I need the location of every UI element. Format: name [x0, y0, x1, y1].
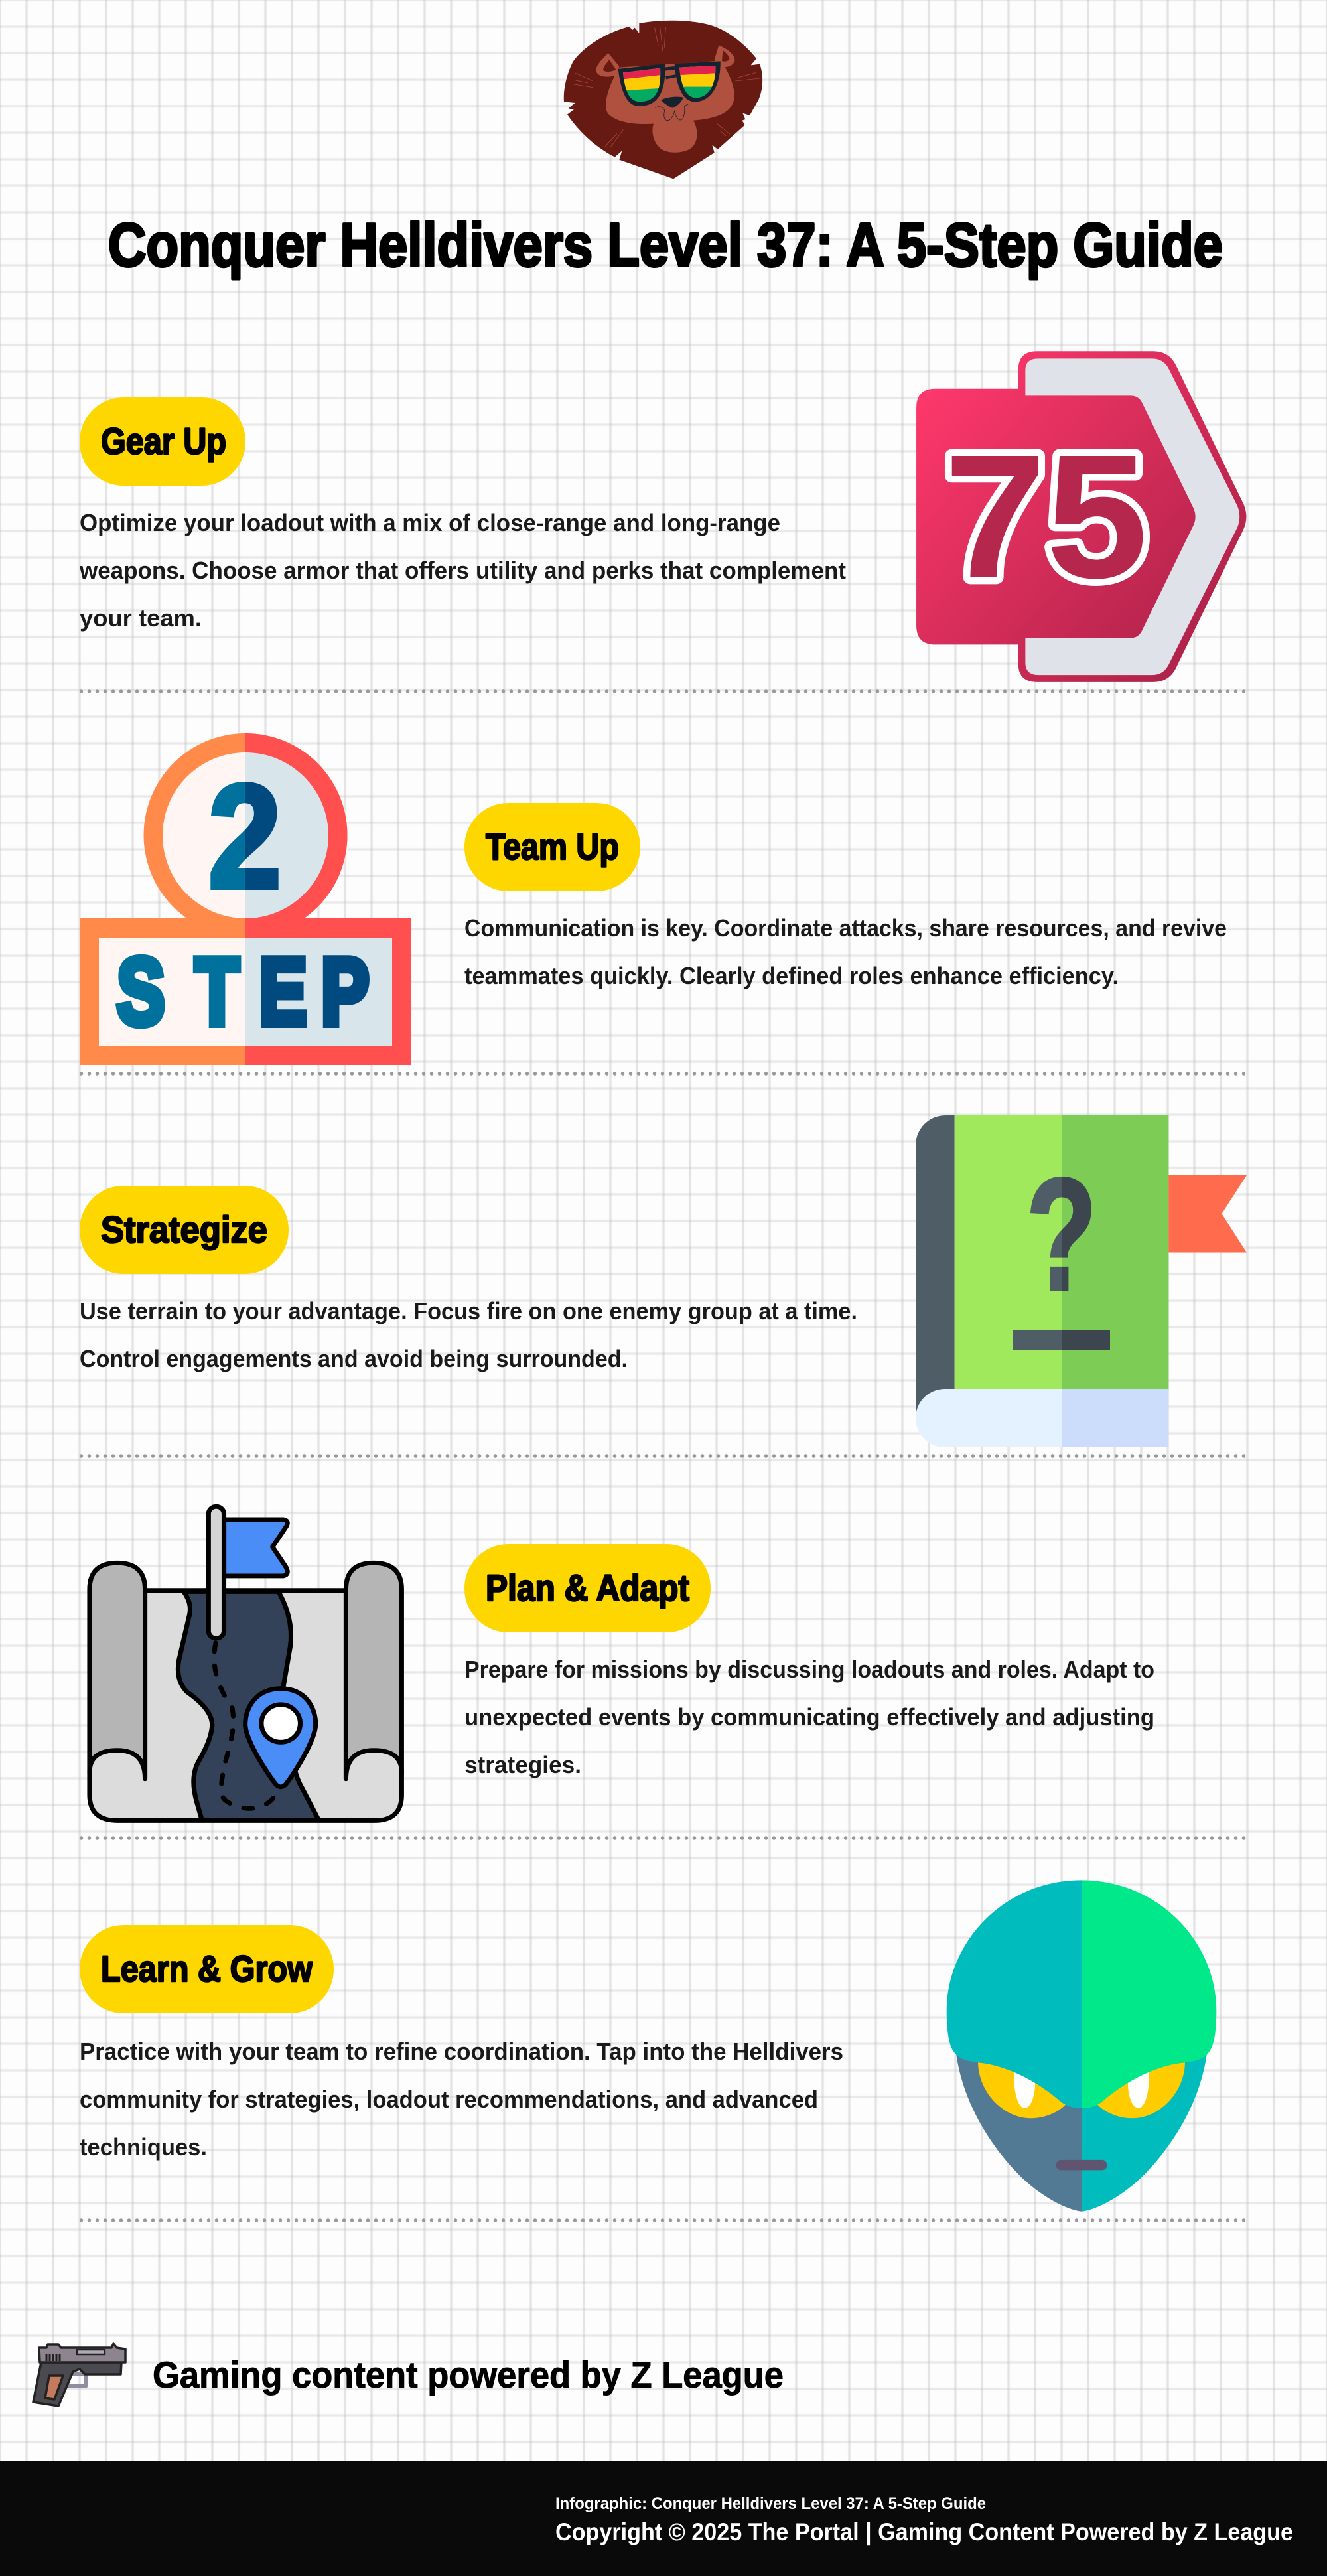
icon: question book: ? — [1026, 1145, 1097, 1323]
text block: team up description — [464, 914, 1227, 989]
heading pill: Team Up: Team Up — [486, 825, 619, 867]
icon: 2 step sign: 2 — [208, 754, 281, 919]
heading pill: Learn & Grow: Learn & Grow — [101, 1948, 313, 1989]
panel: step 1 gear up — [79, 351, 1247, 691]
icon: pistol — [33, 2344, 125, 2406]
heading pill: Gear Up: Gear Up — [101, 420, 226, 462]
heading pill: Strategize: Strategize — [101, 1208, 267, 1250]
text block: gear up description: your team. — [80, 605, 202, 632]
divider — [81, 1836, 1247, 1840]
text block: team up description: Communication is key. Coordinate attacks, share resources, and revive — [464, 914, 1227, 942]
text block: gear up description — [79, 509, 846, 632]
footer bar — [0, 2461, 1327, 2576]
icon: 2 step sign: EP — [259, 939, 369, 1044]
icon: 2 step sign: ST — [117, 939, 239, 1044]
heading pill: Strategize — [80, 1186, 289, 1274]
heading pill: Gear Up — [80, 397, 245, 486]
panel: step 3 strategize — [80, 1115, 1247, 1456]
text block: plan and adapt description — [464, 1656, 1154, 1778]
text block: learn and grow description: Practice with your team to refine coordination. Tap into the Helldivers — [80, 2038, 843, 2065]
heading pill: Plan & Adapt — [464, 1544, 711, 1632]
heading pill: Plan & Adapt: Plan & Adapt — [486, 1567, 689, 1609]
icon: alien head — [947, 1880, 1216, 2212]
text block: plan and adapt description: unexpected events by communicating effectively and adjusting — [464, 1703, 1154, 1731]
text block: strategize description: Control engagements and avoid being surrounded. — [80, 1345, 628, 1372]
panel: step 4 plan and adapt — [81, 1506, 1247, 1838]
heading pill: Learn & Grow — [80, 1925, 334, 2013]
panel: step 2 team up — [80, 733, 1247, 1074]
divider — [81, 689, 1247, 693]
heading pill: Team Up — [464, 803, 640, 891]
text block: plan and adapt description: strategies. — [464, 1751, 581, 1778]
divider — [81, 2218, 1247, 2222]
footer tagline: Gaming content powered by Z League — [153, 2354, 784, 2396]
text block: learn and grow description — [80, 2038, 843, 2161]
text block: plan and adapt description: Prepare for missions by discussing loadouts and roles. Adapt to — [464, 1656, 1154, 1683]
footer caption: Infographic: Conquer Helldivers Level 37: A 5-Step Guide — [555, 2494, 986, 2513]
divider — [81, 1454, 1247, 1458]
text block: learn and grow description: community for strategies, loadout recommendations, and advanced — [80, 2086, 818, 2113]
divider — [81, 1072, 1247, 1076]
text block: team up description: teammates quickly. Clearly defined roles enhance efficiency. — [464, 962, 1119, 989]
icon: level 75 badge: 75 — [944, 418, 1148, 615]
icon: level 75 badge — [916, 351, 1246, 682]
text block: learn and grow description: techniques. — [80, 2133, 207, 2161]
text block: gear up description: weapons. Choose armor that offers utility and perks that complement — [79, 557, 846, 584]
text block: gear up description: Optimize your loadout with a mix of close-range and long-range — [80, 509, 780, 536]
panel: step 5 learn and grow — [80, 1880, 1247, 2220]
text block: strategize description — [80, 1297, 857, 1372]
icon: question book — [916, 1115, 1247, 1447]
icon: map with flag and pin — [90, 1506, 401, 1820]
icon: 2 step sign — [80, 733, 411, 1065]
icon: lion logo — [564, 21, 762, 179]
text block: strategize description: Use terrain to your advantage. Focus fire on one enemy group at a time. — [80, 1297, 857, 1324]
